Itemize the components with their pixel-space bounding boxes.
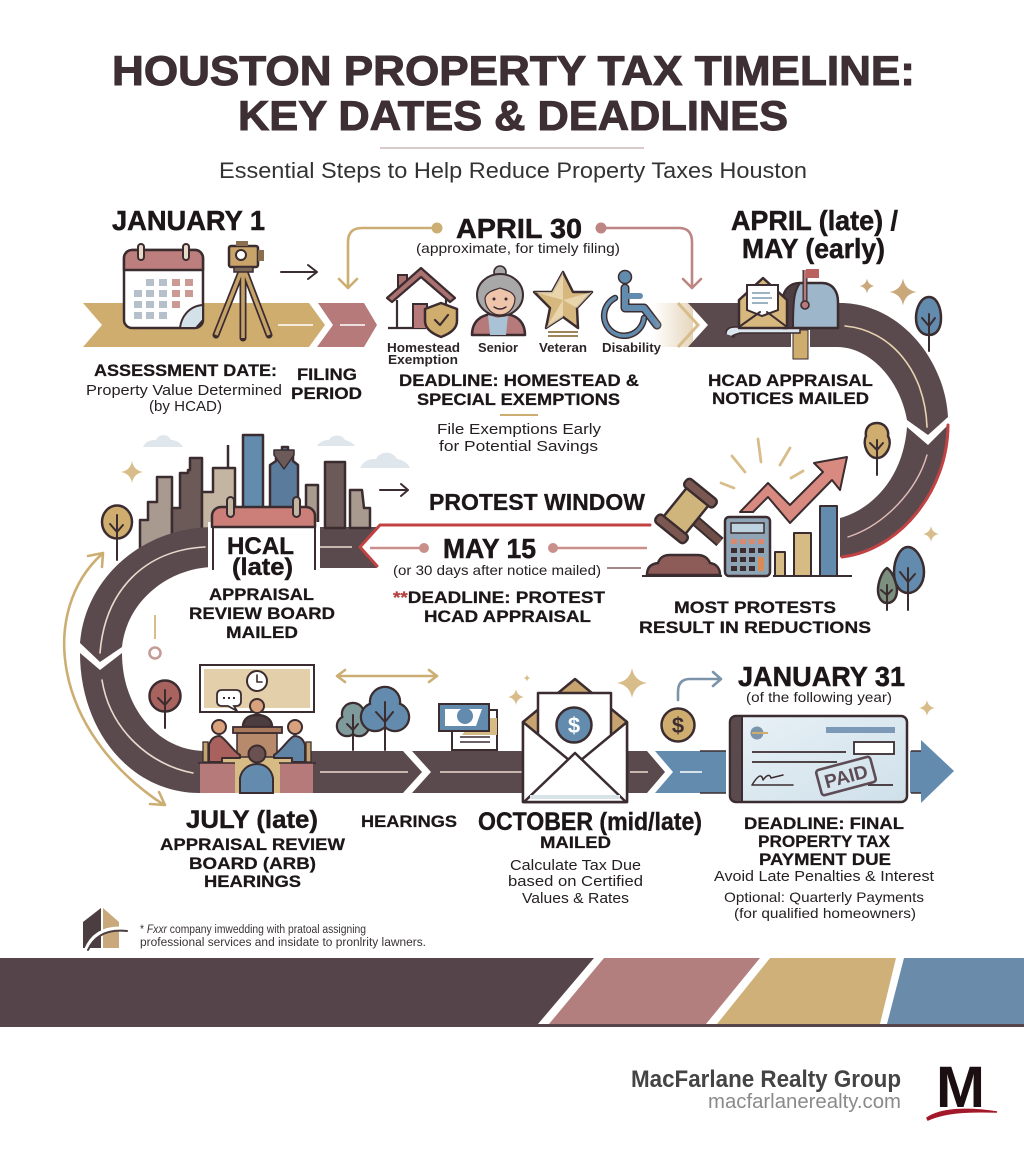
tree: gold	[865, 423, 890, 475]
heading: review board mailed: REVIEW BOARD	[189, 604, 335, 623]
panel: January 1 assessment	[83, 205, 377, 415]
note: file early: for Potential Savings	[439, 438, 598, 455]
panel: April 30 exemptions	[339, 213, 701, 455]
icon: senior: Senior	[478, 340, 518, 355]
note: calculate tax due	[508, 857, 643, 907]
heading: final payment: PAYMENT DUE	[759, 850, 891, 869]
title	[112, 47, 915, 139]
title: HOUSTON PROPERTY TAX TIMELINE:	[112, 47, 915, 94]
ribbon: gold and pink chevrons	[83, 303, 377, 347]
date: April late / May early: APRIL (late) /	[731, 205, 898, 236]
icon: veteran star	[534, 272, 592, 355]
panel: July ARB hearings	[80, 653, 497, 891]
road: upper left curve	[80, 527, 215, 662]
icon: homestead house: Exemption	[388, 352, 458, 367]
tree: blue	[916, 297, 941, 351]
icon: skyline	[140, 435, 370, 555]
heading: protest deadline: **DEADLINE: PROTEST	[393, 588, 606, 607]
note: quarterly: Optional: Quarterly Payments	[724, 889, 924, 905]
note: calculate tax due: Values & Rates	[522, 890, 629, 907]
label: filing period	[291, 365, 362, 403]
icon: paid check	[727, 713, 910, 805]
note: penalties: Avoid Late Penalties & Interest	[714, 868, 935, 885]
icon: money and document	[439, 704, 497, 750]
icon: envelope with dollar: $	[568, 713, 580, 738]
heading: most protests: RESULT IN REDUCTIONS	[639, 618, 871, 637]
icon: calculator	[725, 517, 770, 576]
note: following year: (of the following year)	[746, 689, 892, 705]
note: approximate: (approximate, for timely filing)	[416, 240, 620, 256]
icon: homestead house	[387, 268, 460, 367]
icon: wheelchair: Disability	[602, 340, 662, 355]
heading: most protests: MOST PROTESTS	[674, 598, 836, 617]
road: lower right curve	[840, 425, 948, 557]
heading: October: OCTOBER (mid/late)	[478, 808, 702, 836]
heading: notices mailed: NOTICES MAILED	[712, 389, 869, 408]
chart: rising arrow and bars	[740, 457, 852, 576]
connector dot: pink	[596, 222, 606, 234]
calendar: HCAL late: HCAL	[227, 533, 294, 560]
road segment	[412, 751, 665, 793]
note: quarterly: (for qualified homeowners)	[734, 905, 916, 921]
road center line	[845, 326, 927, 427]
connector dot: gold	[432, 222, 442, 234]
heading: most protests	[639, 598, 871, 637]
note: file early	[437, 421, 602, 455]
connector: gold	[339, 228, 437, 288]
heading: ARB hearings: APPRAISAL REVIEW	[160, 835, 346, 854]
footnote: * Fxxr company imwedding with pratoal assigning	[140, 924, 366, 936]
road dash	[318, 546, 352, 548]
icon: envelope with dollar	[523, 679, 627, 802]
heading: ARB hearings	[160, 835, 346, 891]
heading: ARB hearings: BOARD (ARB)	[189, 854, 316, 873]
trees: blue and grey	[878, 547, 924, 610]
heading: exemptions deadline: DEADLINE: HOMESTEAD &	[399, 371, 639, 390]
title: KEY DATES & DEADLINES	[238, 92, 788, 139]
heading: exemptions deadline: SPECIAL EXEMPTIONS	[417, 390, 620, 409]
heading: July late: JULY (late)	[186, 806, 318, 834]
icon: veteran star: Veteran	[539, 340, 587, 355]
footnote logo	[83, 908, 128, 950]
date: May 15: MAY 15	[443, 533, 536, 564]
road edge: red	[842, 425, 948, 557]
heading: ARB hearings: HEARINGS	[204, 872, 301, 891]
marker: pin	[150, 615, 160, 658]
trees	[338, 688, 408, 750]
label: assessment date: Property Value Determined	[86, 382, 282, 399]
footnote	[140, 924, 426, 949]
rays	[721, 439, 803, 488]
date: April 30: APRIL 30	[456, 213, 582, 244]
icon: gavel	[642, 477, 722, 576]
icon: wheelchair	[602, 270, 662, 355]
panel: protest window	[210, 439, 924, 637]
brand name: MacFarlane Realty Group	[631, 1066, 901, 1093]
sparkles	[860, 278, 939, 542]
heading: review board mailed: APPRAISAL	[209, 585, 314, 604]
panel: October mailed	[412, 668, 702, 907]
road: bottom straight	[200, 751, 422, 793]
heading: final payment: DEADLINE: FINAL	[744, 814, 904, 833]
curved gold double arrow	[64, 553, 165, 805]
subtitle: Essential Steps to Help Reduce Property Taxes Houston	[219, 158, 807, 183]
icon: mailbox with envelope	[726, 269, 838, 359]
connector left	[370, 543, 429, 553]
red chevron arrow	[360, 525, 650, 566]
label: assessment date	[86, 361, 282, 415]
date: January 31: JANUARY 31	[738, 661, 905, 692]
heading: notices mailed	[708, 371, 873, 408]
road: blue arrow	[655, 740, 954, 803]
icon: homestead house: Homestead	[387, 340, 460, 355]
coin: $	[672, 713, 684, 738]
brand logo M: M	[936, 1055, 985, 1120]
heading: notices mailed: HCAD APPRAISAL	[708, 371, 873, 390]
connector: pink	[601, 228, 701, 288]
panel: January 31 payment	[655, 661, 954, 921]
arrow	[380, 484, 408, 496]
sparkle	[919, 700, 935, 716]
road: lower left curve	[80, 653, 205, 793]
panel: HCAL late and skyline	[64, 435, 410, 805]
note: file early: File Exemptions Early	[437, 421, 602, 438]
footer color band	[0, 958, 1024, 1027]
icon: surveyor tripod	[216, 241, 269, 338]
tree: pink round	[150, 680, 180, 728]
note: 30 days: (or 30 days after notice mailed)	[393, 562, 601, 578]
coin	[662, 708, 694, 742]
icon: paid check: PAID	[822, 762, 870, 793]
note: calculate tax due: Calculate Tax Due	[510, 857, 641, 874]
heading: final payment	[744, 814, 904, 869]
note: quarterly	[724, 889, 924, 921]
heading: protest deadline	[393, 588, 606, 626]
label: filing period: FILING	[297, 365, 357, 384]
label: assessment date: (by HCAD)	[149, 398, 222, 415]
calendar: HCAL late	[208, 497, 320, 581]
heading: exemptions deadline	[399, 371, 639, 409]
connector right	[548, 543, 647, 568]
arrow	[281, 265, 317, 279]
icon: calendar	[124, 244, 203, 328]
note: calculate tax due: based on Certified	[508, 873, 643, 890]
tree: gold round	[102, 506, 132, 560]
double arrow	[337, 670, 437, 682]
sparkle	[121, 461, 143, 483]
date: January 1: JANUARY 1	[112, 205, 265, 236]
heading: review board mailed	[189, 585, 335, 642]
road: central section	[210, 527, 378, 568]
heading: hearings: HEARINGS	[361, 812, 457, 831]
clouds	[143, 435, 410, 468]
heading: final payment: PROPERTY TAX	[758, 832, 891, 851]
chevron: fading tan	[653, 303, 698, 347]
footnote: professional services and insidate to pronlrity lawners.	[140, 937, 426, 949]
icon: senior	[472, 266, 525, 355]
brand logo M	[927, 1055, 997, 1120]
date: April late / May early	[731, 205, 898, 264]
heading: protest deadline: HCAD APPRAISAL	[424, 607, 591, 626]
road: upper right curve	[688, 303, 948, 435]
panel: appraisal notices	[653, 205, 948, 557]
sparkles	[508, 668, 647, 705]
icon: hearing room	[198, 665, 316, 793]
date: April late / May early: MAY (early)	[742, 233, 885, 264]
heading: review board mailed: MAILED	[226, 623, 298, 642]
brand url: macfarlanerealty.com	[708, 1091, 901, 1113]
connector: blue	[678, 672, 721, 700]
label: mailed: MAILED	[540, 833, 611, 852]
label: assessment date: ASSESSMENT DATE:	[94, 361, 277, 380]
calendar: HCAL late: (late)	[232, 554, 293, 581]
label: filing period: PERIOD	[291, 384, 362, 403]
heading: protest window: PROTEST WINDOW	[429, 489, 645, 515]
